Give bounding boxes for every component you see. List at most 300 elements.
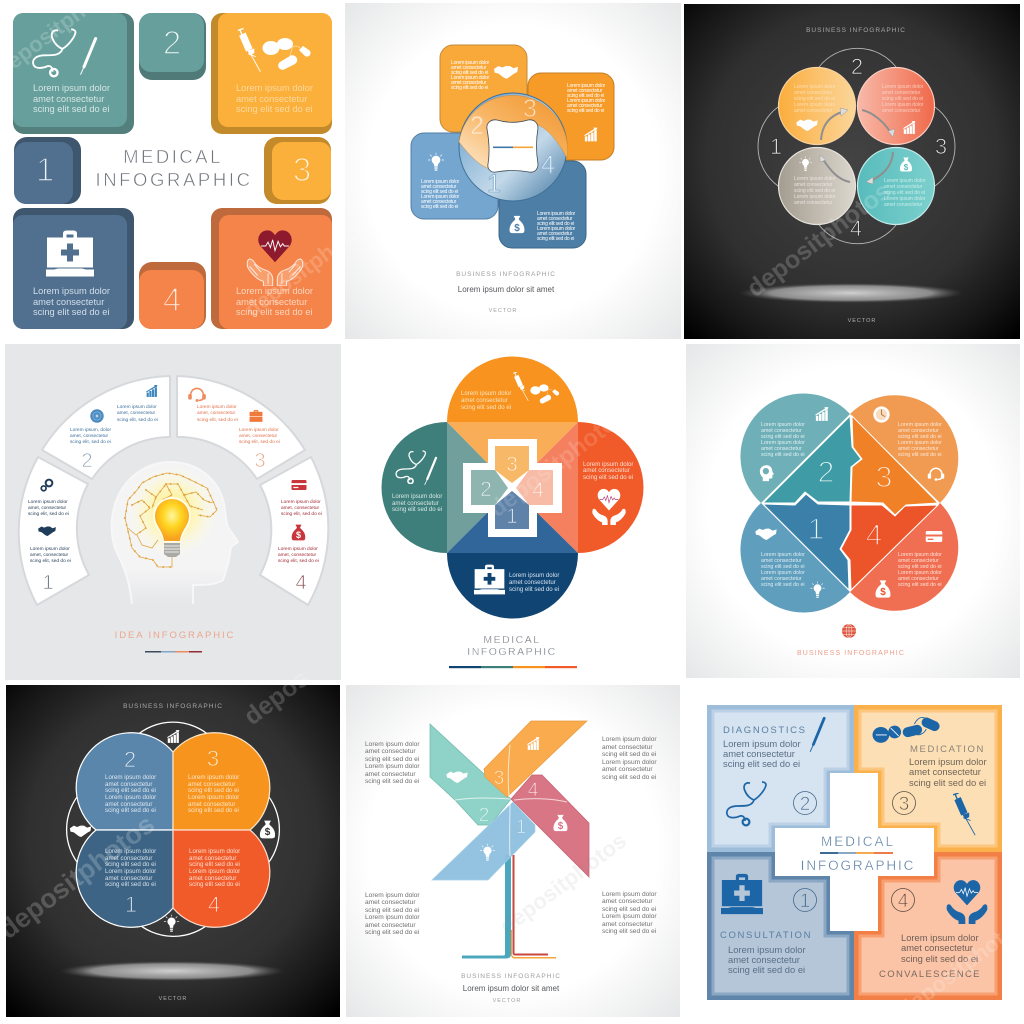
colour key line (145, 651, 202, 652)
tile: diagnostics: Lorem ipsum dolor (33, 83, 110, 93)
central ring: 4 (541, 151, 555, 179)
circle: teal: $ (904, 163, 909, 172)
tile: consultation: scing elit sed do ei (33, 307, 110, 317)
white medical cross with title (775, 773, 934, 931)
quadrant: convalescence: 4 (898, 891, 909, 912)
title: business infographic: BUSINESS INFOGRAPHIC (797, 650, 905, 657)
watermarks: depositphotos (484, 402, 633, 523)
petal 2: teal: amet consectetur (761, 428, 802, 434)
tile: convalescence: scing elit sed do ei (236, 307, 312, 317)
card: orange two (528, 73, 614, 160)
quadrant 4: red: 4 (208, 892, 220, 917)
quadrant 1: dark blue: scing elit sed do ei (105, 881, 156, 888)
quadrant 4: red: amet consectetur (189, 875, 236, 882)
petal 2: teal: Lorem ipsum dolor (761, 422, 805, 428)
circle: orange: amet consectetur (794, 90, 833, 96)
quadrant: diagnostics: amet consectetur (723, 748, 795, 759)
card: orange two: scing elit sed do ei (567, 108, 604, 114)
petal 4: red: scing elit sed do ei (898, 582, 942, 588)
quadrant 3: orange: amet consectetur (188, 781, 235, 788)
card: light blue: amet consectetur (421, 184, 457, 190)
quadrant: convalescence: scing elit sed do ei (901, 953, 978, 964)
arrows between circles (820, 108, 895, 184)
quadrant: medication: scing elit sed do ei (909, 777, 986, 788)
caption: business infographic (461, 973, 561, 1004)
petal 4: red: amet consectetur (898, 558, 939, 564)
title: medical infographic (95, 146, 253, 190)
quadrant 2: blue: amet consectetur (105, 801, 152, 808)
central ring: 1 (487, 170, 501, 198)
tile: number 2: 2 (163, 24, 181, 61)
card: dark blue: Lorem ipsum dolor (537, 211, 576, 217)
numbers 1 to 4 (770, 54, 947, 241)
icons around ring: $ (265, 827, 271, 838)
quadrant 3: orange: 3 (207, 746, 219, 771)
circle: teal: amet consectetur (884, 202, 923, 208)
quadrant: consultation: CONSULTATION (720, 930, 812, 941)
circle: taupe: Lorem ipsum dolor (794, 176, 836, 182)
petal: teal left: Lorem ipsum dolor (392, 493, 442, 500)
blade: teal: 2 (479, 805, 489, 826)
arc segment 1: Lorem ipsum dolor (30, 546, 70, 552)
card: light blue: scing elit sed do ei (421, 189, 458, 195)
quadrant: convalescence: amet consectetur (901, 942, 973, 953)
spotlight ellipse (739, 283, 963, 303)
quadrant: medication: 3 (899, 794, 909, 815)
numbers 1 to 4: 3 (935, 134, 947, 159)
quadrant: diagnostics: DIAGNOSTICS (723, 725, 807, 736)
arc segment 1: scing elit, sed do ei (30, 558, 71, 564)
text block: bottom right: scing elit sed do ei (602, 906, 657, 913)
central ring: 2 (470, 112, 484, 140)
tile: number 4: 4 (163, 281, 181, 318)
title: business infographic: BUSINESS INFOGRAPHIC (806, 27, 906, 34)
quadrant: medication (854, 705, 1002, 852)
circle: coral (858, 68, 934, 144)
text block: bottom left: amet consectetur (365, 899, 416, 906)
arc segment 4: scing elit, sed do ei (281, 511, 322, 517)
arc segment 3: Lorem ipsum dolor (197, 404, 237, 410)
arc segment 1: Lorem ipsum dolor (28, 499, 68, 505)
circle: teal: Lorem ipsum dolor (884, 178, 926, 184)
petal: navy bottom: Lorem ipsum dolor (509, 572, 559, 579)
cross inner shapes and numbers (471, 446, 553, 529)
quadrant: diagnostics (707, 705, 854, 852)
tile: convalescence: Lorem ipsum dolor (236, 286, 313, 296)
arc segment 4: $ (296, 530, 301, 540)
spotlight ellipse (60, 961, 284, 981)
card: orange one: Lorem ipsum dolor (451, 60, 490, 66)
tile: consultation (13, 208, 134, 329)
text block: top left: Lorem ipsum dolor (365, 741, 420, 748)
text block: top right: Lorem ipsum dolor (602, 759, 657, 766)
icons around ring (70, 730, 275, 932)
watermarks: depos (239, 664, 314, 731)
tile: diagnostics: scing elit sed do ei (33, 104, 110, 114)
quadrant 1: dark blue: Lorem ipsum dolor (105, 848, 156, 855)
card: dark blue: scing elit sed do ei (537, 236, 574, 242)
tile: consultation: Lorem ipsum dolor (33, 286, 110, 296)
quadrant 3: orange: amet consectetur (188, 801, 235, 808)
label: vector: VECTOR (159, 996, 187, 1002)
blade: blue (432, 802, 535, 880)
arc segment 2 (42, 376, 170, 479)
petal 2: teal: Lorem ipsum dolor (761, 440, 805, 446)
panel: dark rounded quadrants (6, 685, 340, 1017)
circle: teal: scing elit sed do ei (884, 190, 925, 196)
quadrant 2: blue: scing elit sed do ei (105, 787, 156, 794)
quadrant 2: blue (76, 733, 173, 830)
petal 1: blue: 1 (808, 513, 824, 546)
quadrant: convalescence (854, 852, 1002, 1000)
petal 1: blue (740, 494, 850, 613)
card: orange one: scing elit sed do ei (451, 70, 488, 76)
petal: red right: scing elit sed do ei (583, 474, 633, 481)
text block: bottom right: amet consectetur (602, 898, 653, 905)
circle: coral: amet consectetur (882, 90, 921, 96)
blade: orange (484, 721, 587, 797)
quadrant 2: blue: Lorem ipsum dolor (105, 774, 156, 781)
petal: teal left (382, 422, 512, 553)
quadrant: diagnostics: Lorem ipsum dolor (723, 738, 801, 749)
caption: business infographic: BUSINESS INFOGRAPHIC (456, 271, 556, 278)
cross inner shapes and numbers: 2 (480, 478, 492, 501)
card: light blue: Lorem ipsum dolor (421, 179, 460, 185)
text block: top left: Lorem ipsum dolor (365, 763, 420, 770)
quadrant: convalescence: Lorem ipsum dolor (901, 932, 979, 943)
blade: red: 4 (528, 780, 539, 801)
petal 2: teal (740, 393, 861, 503)
icon: globe (842, 624, 856, 638)
quadrant: consultation: amet consectetur (728, 954, 800, 965)
petal 1: blue: amet consectetur (761, 576, 802, 582)
petal 3: orange: Lorem ipsum dolor (898, 440, 942, 446)
arc segment 4: amet, consectetur (278, 552, 317, 558)
card: orange two: amet consectetur (567, 103, 603, 109)
colour key line (449, 666, 577, 668)
quadrant: consultation: Lorem ipsum dolor (728, 944, 806, 955)
card: orange two: amet consectetur (567, 88, 603, 94)
panel: dark four circles (684, 4, 1020, 339)
quadrant 4: red: Lorem ipsum dolor (189, 848, 240, 855)
tile: convalescence (211, 208, 332, 329)
caption: business infographic: Lorem ipsum dolor sit amet (463, 984, 560, 993)
petal 2: teal: 2 (818, 456, 834, 489)
arc segment 3: Lorem ipsum dolor (239, 427, 279, 433)
text block: top right: scing elit sed do ei (602, 751, 657, 758)
tile: number 3: 3 (293, 151, 311, 188)
quadrant 1: dark blue (76, 830, 173, 927)
petal 4: red (841, 503, 958, 611)
arc segment 2: amet, consectetur (70, 433, 109, 439)
blade: red (511, 775, 589, 877)
tile: medication: amet consectetur (236, 94, 307, 104)
card: orange two: Lorem ipsum dolor (567, 83, 606, 89)
quadrant 3: orange: Lorem ipsum dolor (188, 794, 239, 801)
card: dark blue: amet consectetur (537, 231, 573, 237)
quadrant 1: dark blue: amet consectetur (105, 875, 152, 882)
circle: taupe: amet consectetur (794, 182, 833, 188)
petal 3: orange (850, 395, 958, 515)
arc segment 4: Lorem ipsum dolor (278, 546, 318, 552)
tile: convalescence: amet consectetur (236, 297, 307, 307)
petal 4: red: amet consectetur (898, 576, 939, 582)
arc segment 1: amet, consectetur (30, 552, 69, 558)
arc segment 2: scing elit, sed do ei (117, 417, 158, 423)
arc segment 4: amet, consectetur (281, 505, 320, 511)
petal: orange top: scing elit sed do ei (461, 404, 511, 411)
arc segment 2: Lorem ipsum, dolor (70, 427, 111, 433)
text block: bottom left: Lorem ipsum dolor (365, 914, 420, 921)
arc segment 1: 1 (42, 572, 54, 594)
quadrant: medication: Lorem ipsum dolor (909, 756, 987, 767)
petal: red right: amet consectetur (583, 467, 630, 474)
text block: top right: amet consectetur (602, 766, 653, 773)
petal: navy bottom (447, 488, 578, 618)
quadrant 4: red: Lorem ipsum dolor (189, 868, 240, 875)
text block: bottom right: Lorem ipsum dolor (602, 891, 657, 898)
text block: bottom left: scing elit sed do ei (365, 907, 420, 914)
petal: red right (512, 422, 644, 553)
text block: top left: scing elit sed do ei (365, 756, 420, 763)
numbers 1 to 4: 2 (851, 54, 863, 79)
circle: coral: scing elit sed do ei (882, 96, 923, 102)
text block: bottom right: Lorem ipsum dolor (602, 913, 657, 920)
tile: diagnostics: amet consectetur (33, 94, 104, 104)
title: medical infographic: MEDICAL (123, 146, 223, 167)
text block: bottom left: amet consectetur (365, 922, 416, 929)
card: orange two: scing elit sed do ei (567, 93, 604, 99)
tile: medication: scing elit sed do ei (236, 104, 312, 114)
tile: number 4 (139, 262, 206, 329)
circle: orange: Lorem ipsum dolor (794, 84, 836, 90)
arc segment 3: 3 (254, 450, 266, 472)
circle: taupe (778, 148, 856, 224)
circle: orange: scing elit sed do ei (794, 96, 835, 102)
petal 2: teal: scing elit sed do ei (761, 452, 805, 458)
petal 3: orange: amet consectetur (898, 446, 939, 452)
circle: orange: Lorem ipsum dolor (794, 102, 836, 108)
quadrant 4: red: amet consectetur (189, 855, 236, 862)
white medical cross with title: MEDICAL (821, 834, 895, 849)
tile: consultation: amet consectetur (33, 297, 104, 307)
circle: taupe: Lorem ipsum dolor (794, 194, 836, 200)
panel: medical rounded tiles (0, 0, 342, 340)
card: orange one (440, 45, 527, 132)
arc segment 3: scing elit, sed do ei (239, 439, 280, 445)
circle: taupe: amet consectetur (794, 200, 833, 206)
circle: coral: amet consectetur (882, 108, 921, 114)
central ring: 3 (523, 95, 537, 123)
title: business infographic: BUSINESS INFOGRAPHIC (123, 703, 223, 710)
petal 1: blue: Lorem ipsum dolor (761, 570, 805, 576)
circle: orange (778, 68, 856, 144)
petal 1: blue: Lorem ipsum dolor (761, 552, 805, 558)
text block: top right: scing elit sed do ei (602, 774, 657, 781)
numbers 1 to 4: 4 (850, 216, 862, 241)
quadrant 2: blue: amet consectetur (105, 781, 152, 788)
card: orange one: amet consectetur (451, 65, 487, 71)
pinwheel stem (462, 855, 556, 958)
tile: diagnostics (13, 13, 134, 134)
petal 4: red: $ (880, 587, 886, 598)
petal 1: blue: scing elit sed do ei (761, 564, 805, 570)
petal 3: orange: Lorem ipsum dolor (898, 422, 942, 428)
arc segment 2: amet, consectetur (117, 410, 156, 416)
petal 4: red: scing elit sed do ei (898, 564, 942, 570)
quadrant 1: dark blue: amet consectetur (105, 855, 152, 862)
petal 3: orange: 3 (876, 461, 892, 494)
central ring (459, 93, 568, 201)
arc segment 1 (19, 457, 89, 605)
white centre cross (463, 439, 562, 537)
arc segment 3: amet, consectetur (197, 410, 236, 416)
caption: business infographic: VECTOR (489, 308, 517, 314)
text block: top right: Lorem ipsum dolor (602, 736, 657, 743)
quadrant: diagnostics: scing elit sed do ei (723, 758, 800, 769)
quadrant: consultation: 1 (800, 891, 810, 912)
quadrant 4: red (173, 830, 270, 927)
arc segment 3: scing elit, sed do ei (197, 417, 238, 423)
panel: idea arc infographic (5, 344, 341, 680)
blade: orange: 3 (494, 768, 504, 789)
quadrant: medication: MEDICATION (910, 744, 985, 755)
circle: orange: amet consectetur (794, 108, 833, 114)
arc segment 4 (260, 457, 328, 605)
white medical cross with title: INFOGRAPHIC (801, 858, 915, 873)
arc segment 4: 4 (295, 572, 307, 594)
watermarks: depositphotos (742, 177, 896, 303)
tile: number 1 (14, 137, 81, 204)
card: dark blue: amet consectetur (537, 216, 573, 222)
card: light blue: scing elit sed do ei (421, 204, 458, 210)
quadrant 1: dark blue: scing elit sed do ei (105, 861, 156, 868)
caption: business infographic: BUSINESS INFOGRAPHIC (461, 973, 561, 980)
caption: business infographic (456, 271, 556, 314)
quadrant: medication: amet consectetur (909, 766, 981, 777)
quadrant 2: blue: 2 (124, 747, 136, 772)
petal 1: blue: scing elit sed do ei (761, 582, 805, 588)
arc segment 2: scing elit, sed do ei (70, 439, 111, 445)
title: idea infographic: IDEA INFOGRAPHIC (115, 630, 235, 641)
circle: teal (858, 148, 934, 224)
quadrant 1: dark blue: Lorem ipsum dolor (105, 868, 156, 875)
tile: number 3 (264, 137, 331, 204)
watermarks: depositphotos (240, 211, 376, 322)
outer outline arcs (758, 48, 955, 244)
cross inner shapes and numbers: 3 (506, 453, 518, 476)
quadrant 2: blue: Lorem ipsum dolor (105, 794, 156, 801)
title: medical infographic (467, 634, 557, 658)
card: dark blue: Lorem ipsum dolor (537, 226, 576, 232)
watermarks: depositphotos (495, 828, 631, 939)
quadrant: convalescence: CONVALESCENCE (879, 969, 981, 980)
text block: top right: amet consectetur (602, 744, 653, 751)
light bulb (153, 497, 191, 557)
quadrant 3: orange: scing elit sed do ei (188, 787, 239, 794)
quadrant 1: dark blue: 1 (125, 892, 137, 917)
circuit brain (125, 473, 217, 567)
petal 1: blue: amet consectetur (761, 558, 802, 564)
card: light blue: amet consectetur (421, 199, 457, 205)
circle: teal: Lorem ipsum dolor (884, 196, 926, 202)
outer outline arcs (67, 722, 279, 936)
caption: business infographic: Lorem ipsum dolor sit amet (458, 285, 555, 294)
quadrant: diagnostics: 2 (800, 794, 810, 815)
tile: number 1: 1 (36, 151, 54, 188)
card: orange one: scing elit sed do ei (451, 85, 488, 91)
petal 3: orange: scing elit sed do ei (898, 434, 942, 440)
title: medical infographic: INFOGRAPHIC (95, 169, 253, 190)
arc segment 2: Lorem ipsum dolor (117, 404, 157, 410)
card: light blue (411, 133, 498, 219)
arc segment 1: scing elit, sed do ei (28, 511, 69, 517)
text block: bottom right: amet consectetur (602, 921, 653, 928)
quadrant 2: blue: scing elit sed do ei (105, 807, 156, 814)
quadrant 4: red: scing elit sed do ei (189, 881, 240, 888)
card: orange one: Lorem ipsum dolor (451, 75, 490, 81)
circle: teal: amet consectetur (884, 184, 923, 190)
numbers 1 to 4: 1 (770, 134, 782, 159)
label: vector: VECTOR (848, 318, 876, 324)
petal: red right: Lorem ipsum dolor (583, 461, 633, 468)
card: dark blue: scing elit sed do ei (537, 221, 574, 227)
text block: bottom right: scing elit sed do ei (602, 928, 657, 935)
quadrant 3: orange (173, 733, 270, 830)
head with glowing bulb and circuit brain (112, 462, 238, 604)
tile: medication (211, 13, 332, 134)
circle: taupe: scing elit sed do ei (794, 188, 835, 194)
panel: medical cross quadrants (683, 683, 1024, 1024)
petal: orange top: Lorem ipsum dolor (461, 390, 511, 397)
petal: orange top: amet consectetur (461, 397, 508, 404)
petal: teal left: amet consectetur (392, 500, 439, 507)
text block: top left: amet consectetur (365, 771, 416, 778)
petal 4: red: 4 (866, 519, 882, 552)
petal: orange top (447, 356, 578, 488)
arc segment 4: Lorem ipsum dolor (281, 499, 321, 505)
arc segment 4: scing elit, sed do ei (278, 558, 319, 564)
quadrant: consultation: scing elit sed do ei (728, 964, 805, 975)
panel: pinwheel infographic (346, 685, 680, 1017)
title: medical infographic: MEDICAL (483, 634, 541, 646)
panel: business jigsaw petals (686, 344, 1020, 678)
panel: business overlapping squares (345, 3, 681, 339)
cross inner shapes and numbers: 4 (532, 479, 544, 502)
title: medical infographic: INFOGRAPHIC (467, 646, 557, 658)
arc segment 3 (177, 376, 305, 479)
circle: coral: Lorem ipsum dolor (882, 102, 924, 108)
petal: teal left: scing elit sed do ei (392, 506, 442, 513)
petal 4: red: Lorem ipsum dolor (898, 570, 942, 576)
quadrant 4: red: scing elit sed do ei (189, 861, 240, 868)
tile: number 2 (139, 13, 206, 80)
petal 3: orange: scing elit sed do ei (898, 452, 942, 458)
quadrant: consultation (707, 852, 854, 1000)
blade: blue: 1 (516, 817, 526, 838)
petal 2: teal: amet consectetur (761, 446, 802, 452)
text block: bottom left: Lorem ipsum dolor (365, 892, 420, 899)
arc segment 2: 2 (81, 450, 93, 472)
arc segment 3: amet, consectetur (239, 433, 278, 439)
card: orange two: Lorem ipsum dolor (567, 98, 606, 104)
arc segment 1: amet, consectetur (28, 505, 67, 511)
blade: red: $ (558, 821, 564, 832)
card: dark blue: $ (514, 223, 520, 234)
text block: top left: scing elit sed do ei (365, 778, 420, 785)
petal: navy bottom: scing elit sed do ei (509, 586, 559, 593)
text block: bottom left: scing elit sed do ei (365, 929, 420, 936)
